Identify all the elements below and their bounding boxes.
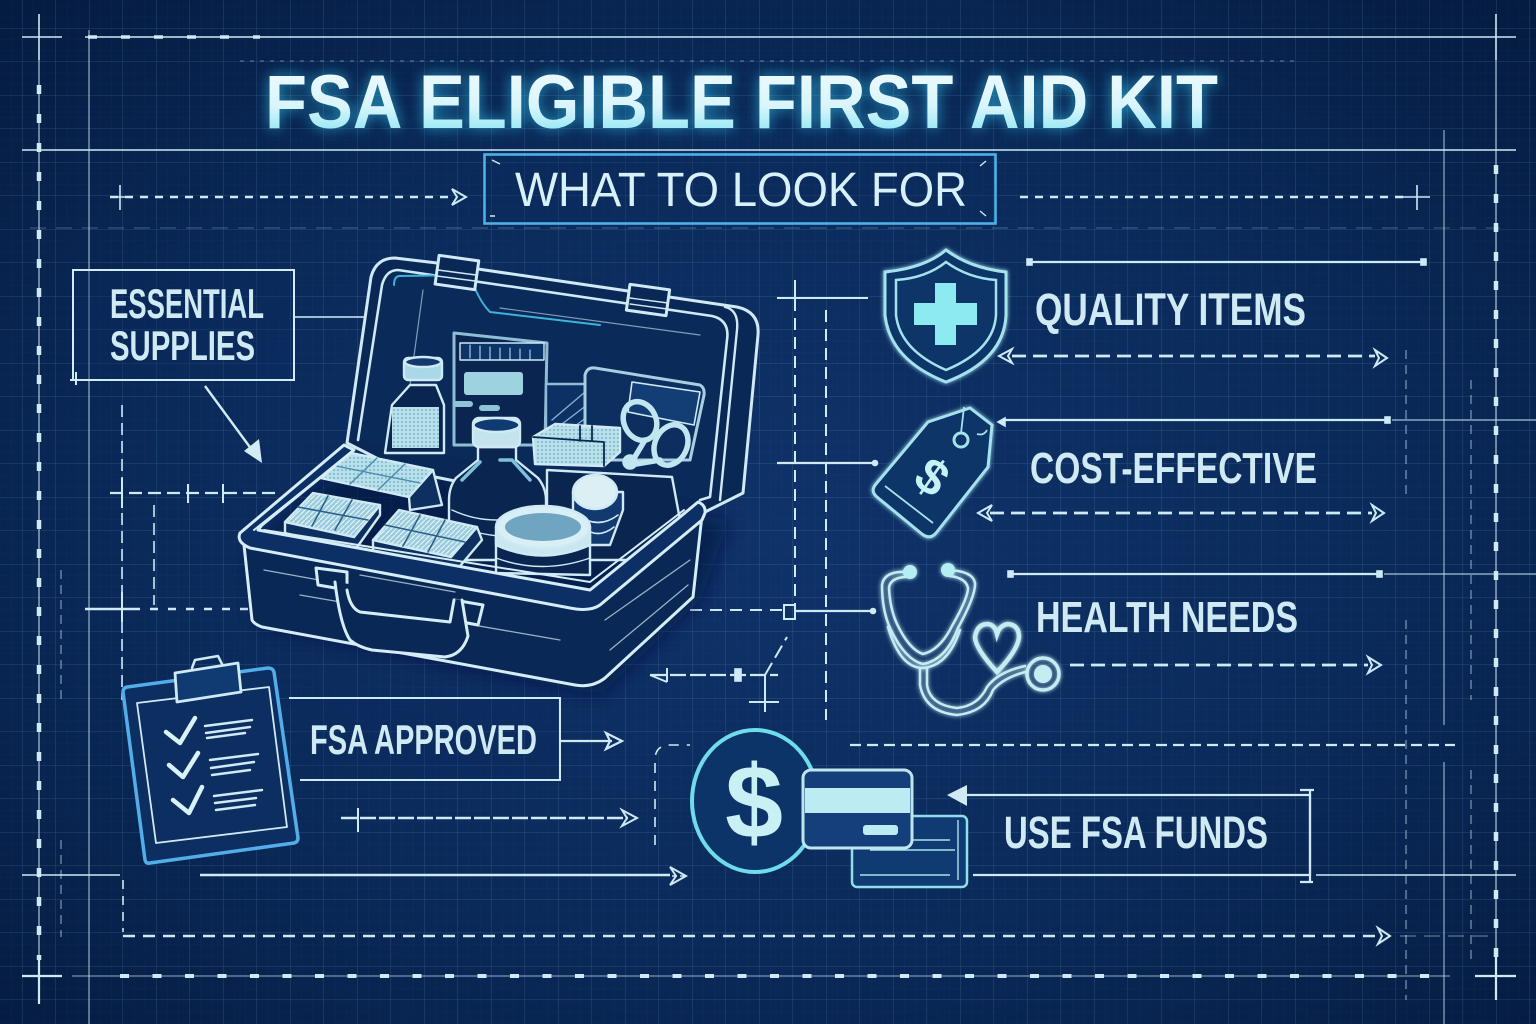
- callout: fsa approved: FSA APPROVED: [310, 716, 537, 763]
- kit lid: [347, 255, 758, 520]
- roll of tape: [573, 475, 623, 545]
- tall box: [454, 333, 547, 445]
- icon: clipboard checklist: [123, 656, 298, 863]
- jar: [496, 506, 590, 575]
- kit contents: [285, 333, 704, 575]
- subtitle flanking lines: [110, 185, 1430, 210]
- outer frame: top: [22, 14, 1516, 150]
- label: cost-effective: COST-EFFECTIVE: [1030, 444, 1317, 493]
- callout: essential supplies: ESSENTIAL: [110, 280, 264, 327]
- outer frame: bottom: [22, 955, 1516, 1004]
- scissors: [617, 396, 694, 471]
- callout: essential supplies: SUPPLIES: [110, 322, 255, 369]
- label: quality items: QUALITY ITEMS: [1035, 284, 1306, 335]
- icon: dollar coin and payment cards: [692, 730, 967, 887]
- label: health needs: HEALTH NEEDS: [1036, 593, 1298, 642]
- kit base: [239, 445, 705, 686]
- right-side leader lines: [978, 259, 1536, 673]
- callout: use fsa funds: USE FSA FUNDS: [1004, 807, 1268, 858]
- subtitle box: WHAT TO LOOK FOR: [515, 164, 967, 217]
- dark carton: [547, 470, 680, 560]
- icon: price tag with dollar sign: [873, 407, 992, 537]
- large bottle: [449, 418, 546, 560]
- left-side construction lines: [85, 405, 275, 700]
- gauze box: [533, 424, 620, 466]
- centre construction lines: [650, 280, 1455, 845]
- callout: use fsa funds: [947, 785, 1314, 882]
- pouch and rear box: [546, 368, 704, 460]
- icon: stethoscope with heart: [882, 563, 1059, 715]
- long lower lines: [22, 867, 1516, 944]
- icon: dollar coin and payment cards: $: [725, 745, 783, 861]
- gauze pad A: [321, 453, 442, 510]
- gauze pad B: [285, 493, 380, 550]
- first aid kit illustration: [239, 255, 758, 695]
- title: FSA ELIGIBLE FIRST AID KIT: [265, 60, 1218, 145]
- icon: price tag with dollar sign: $: [905, 446, 960, 508]
- callout: fsa approved: [289, 698, 637, 832]
- gauze pad C: [373, 510, 482, 572]
- kit handle: [316, 568, 483, 657]
- icon: shield with medical cross: [885, 250, 1006, 382]
- small bottle: [385, 357, 444, 453]
- callout: essential supplies: [70, 270, 408, 463]
